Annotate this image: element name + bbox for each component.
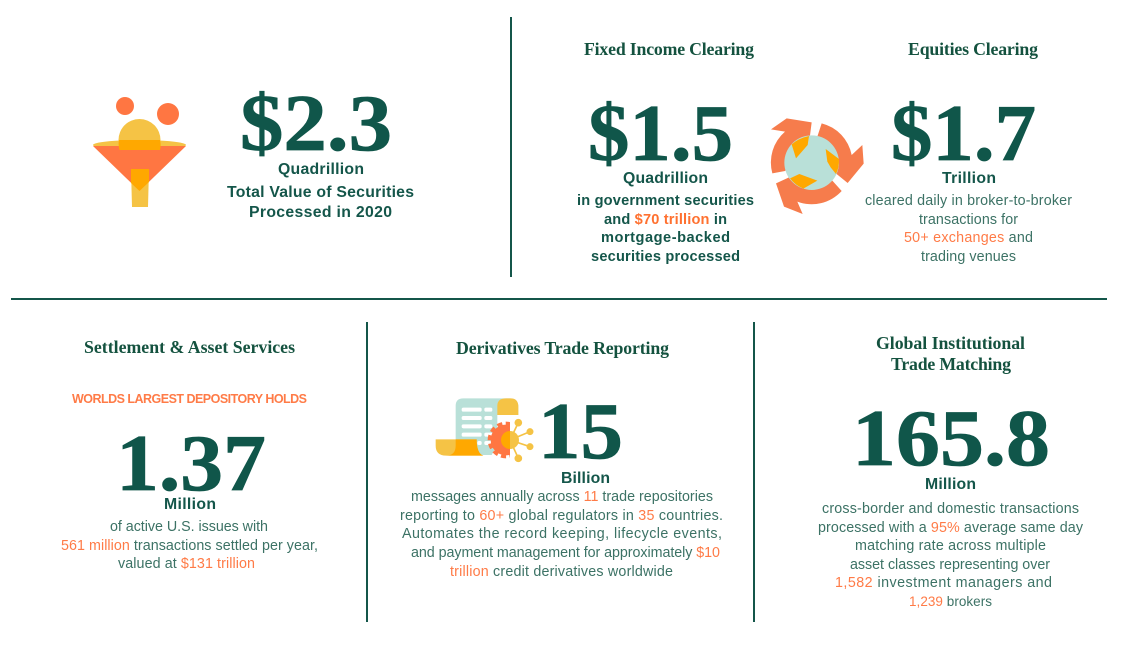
unit: Quadrillion: Quadrillion [623, 170, 708, 187]
icon: circular arrows [771, 118, 864, 214]
heading: settlement: Settlement & Asset Services [84, 337, 295, 357]
description: government securities: securities processed [591, 249, 740, 265]
big number: $1.5: $1.5 [588, 88, 733, 178]
description: government securities [577, 193, 754, 265]
description: total value: Total Value of Securities [227, 184, 414, 201]
description: cross-border transactions: processed with a 95% average same day [818, 520, 1084, 536]
description: broker-to-broker: transactions for [919, 212, 1018, 228]
description: cross-border transactions: matching rate across multiple [855, 538, 1046, 554]
description: trade repositories: Automates the record keeping, lifecycle events, [402, 526, 722, 542]
description: trade repositories: and payment management for approximately $10 [411, 545, 720, 561]
description: broker-to-broker: trading venues [921, 249, 1016, 265]
panel: global institutional trade matching [818, 333, 1084, 609]
description: government securities: in government securities [577, 193, 754, 209]
heading: global institutional [876, 333, 1025, 374]
unit: Trillion: Trillion [942, 170, 996, 187]
description: trade repositories: messages annually across 11 trade repositories [411, 489, 713, 505]
panel: settlement and asset services [61, 337, 318, 572]
description: cross-border transactions [818, 501, 1084, 609]
big number: 1.37: 1.37 [116, 419, 266, 507]
heading: global institutional: Trade Matching [891, 354, 1011, 374]
big number: 165.8: 165.8 [852, 395, 1050, 483]
description: trade repositories [400, 489, 723, 580]
description: government securities: mortgage-backed [601, 230, 730, 246]
unit: Billion: Billion [561, 470, 610, 487]
description: total value [227, 184, 414, 221]
description: cross-border transactions: 1,582 investment managers and [835, 575, 1052, 591]
description: active issues: of active U.S. issues with [110, 519, 268, 535]
description: broker-to-broker [865, 193, 1072, 265]
unit: Quadrillion: Quadrillion [278, 161, 364, 178]
description: active issues [61, 519, 318, 572]
subheading: depository: WORLDS LARGEST DEPOSITORY HOLDS [72, 392, 307, 406]
panel: total securities processed [93, 80, 414, 221]
description: broker-to-broker: cleared daily in broker-to-broker [865, 193, 1072, 209]
icon: funnel [93, 97, 186, 207]
big number: 15: 15 [538, 386, 623, 475]
big number: $2.3: $2.3 [240, 80, 392, 168]
description: active issues: valued at $131 trillion [118, 556, 255, 572]
heading: global institutional: Global Institutional [876, 333, 1025, 353]
description: cross-border transactions: cross-border and domestic transactions [822, 501, 1079, 517]
panel: fixed income clearing [577, 39, 754, 265]
description: trade repositories: reporting to 60+ global regulators in 35 countries. [400, 508, 723, 524]
description: total value: Processed in 2020 [249, 204, 392, 221]
description: cross-border transactions: 1,239 brokers [909, 594, 992, 609]
heading: fixed income clearing: Fixed Income Clearing [584, 39, 754, 59]
description: active issues: 561 million transactions settled per year, [61, 538, 318, 554]
description: broker-to-broker: 50+ exchanges and [904, 230, 1033, 246]
heading: derivatives: Derivatives Trade Reporting [456, 338, 669, 358]
panel: equities clearing [865, 39, 1072, 265]
panel: derivatives trade reporting [400, 338, 723, 580]
description: cross-border transactions: asset classes representing over [850, 557, 1050, 573]
description: trade repositories: trillion credit derivatives worldwide [450, 564, 673, 580]
unit: Million: Million [164, 496, 216, 513]
icon: document with gear [436, 398, 533, 461]
description: government securities: and $70 trillion in [604, 212, 727, 228]
unit: Million: Million [925, 476, 976, 493]
heading: equities clearing: Equities Clearing [908, 39, 1038, 59]
big number: $1.7: $1.7 [891, 88, 1036, 178]
